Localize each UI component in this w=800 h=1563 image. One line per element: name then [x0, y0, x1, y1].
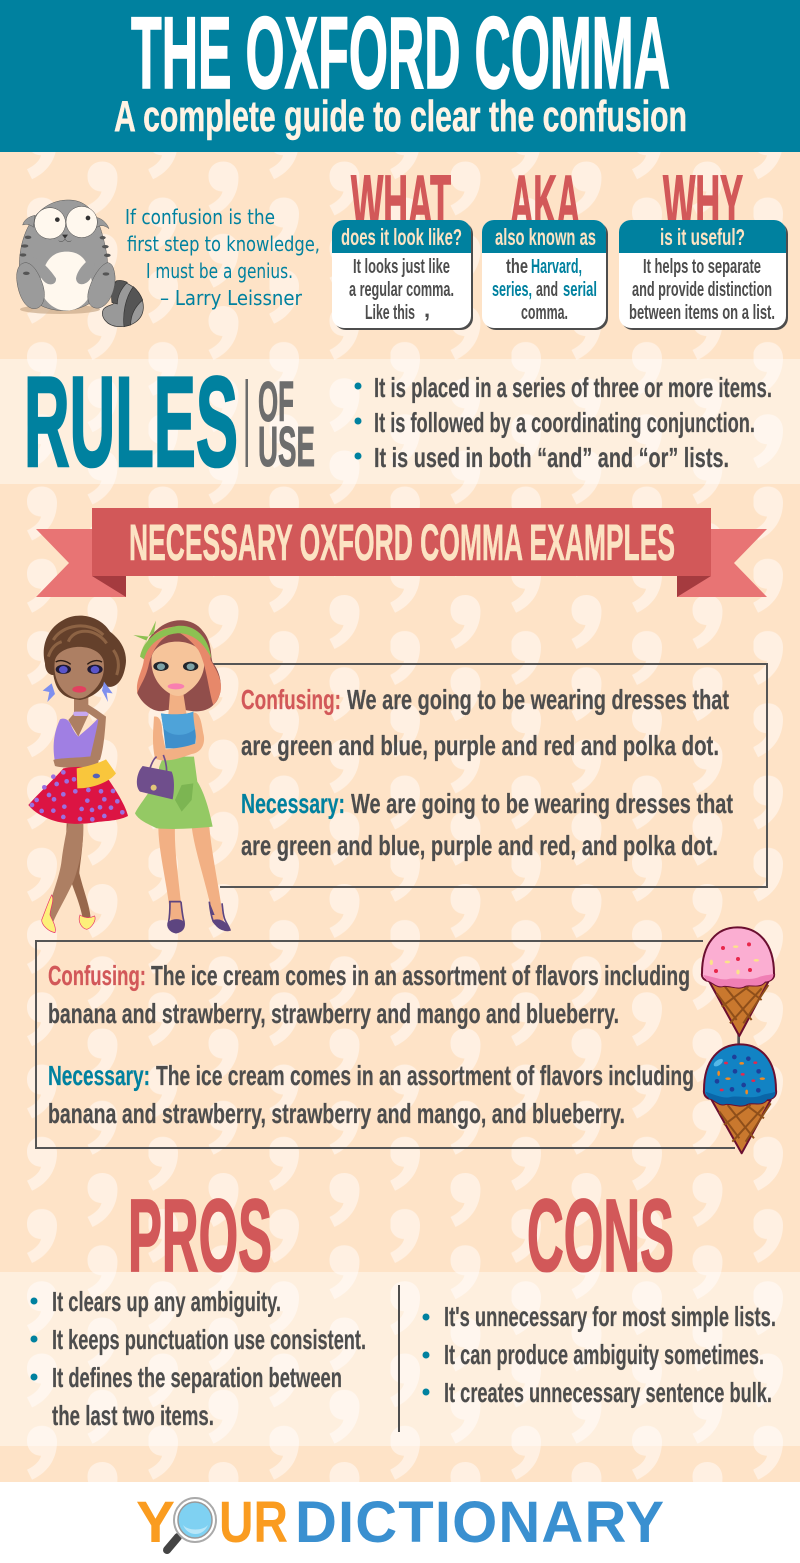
hair: [44, 616, 126, 700]
green skirt: [135, 757, 213, 829]
cat stripes: [20, 236, 111, 276]
rules list: [354, 372, 772, 473]
panel: aka: also known as: [495, 224, 596, 250]
panel: rules of use: RULES: [24, 351, 238, 494]
panel: aka: serial: [563, 279, 597, 301]
legs: [66, 823, 91, 918]
shoes: [42, 895, 55, 933]
panel: what: It looks just like: [353, 256, 450, 278]
pros list: the last two items.: [52, 1400, 214, 1431]
pros list: [30, 1286, 366, 1431]
necessary example: Necessary:: [48, 1060, 150, 1091]
panel: dresses example: [212, 664, 767, 887]
green headband: [140, 626, 211, 659]
pink cone: [702, 927, 774, 1036]
panel: pros and cons: [0, 1272, 800, 1446]
footer logo: DICTIONARY: [295, 1490, 664, 1555]
panel: what: WHAT: [351, 160, 451, 243]
neck: [68, 693, 88, 737]
footer logo: UR: [219, 1490, 288, 1555]
necessary example: [48, 1060, 694, 1129]
ribbon heading: [36, 508, 767, 597]
necessary example: [241, 788, 733, 861]
face: [151, 642, 204, 696]
panel: what: does it look like?: [341, 224, 462, 250]
icon: ice cream cones: [702, 927, 776, 1153]
quote: first step to knowledge,: [127, 232, 320, 256]
cat body: [19, 200, 108, 311]
illustration: girl in green skirt: [133, 620, 230, 933]
confusing example: [241, 684, 729, 761]
panel: rules of use: [0, 351, 800, 494]
confusing example: Confusing:: [241, 684, 341, 715]
panel: why: is it useful?: [660, 224, 745, 250]
cat eyes: [34, 208, 66, 239]
face: [54, 647, 104, 698]
cons list: [422, 1301, 776, 1408]
footer logo: Y: [136, 1490, 175, 1555]
lips: [168, 683, 184, 689]
pros list: It defines the separation between: [52, 1362, 342, 1393]
heading: of use: OF: [258, 370, 294, 434]
confusing example: [48, 960, 690, 1029]
panel: why: [619, 160, 788, 330]
heading: of use: [258, 370, 315, 479]
top: [54, 715, 101, 762]
legs: [158, 827, 183, 922]
quote: I must be a genius.: [146, 259, 293, 283]
arms: [153, 713, 204, 760]
panel: ice cream example: [36, 941, 735, 1148]
skirt: [28, 767, 128, 824]
lips: [72, 686, 86, 693]
panel: aka: AKA: [510, 160, 580, 243]
panel: what: a regular comma.: [349, 279, 454, 301]
panel: aka: the: [506, 256, 528, 278]
cat arms and legs: [17, 257, 115, 309]
yellow purse: [77, 759, 116, 788]
earrings: [43, 683, 55, 702]
panel: aka: series,: [492, 279, 532, 301]
footer logo: [0, 1482, 800, 1563]
panel: what: Like this: [365, 302, 415, 324]
blue cone: [704, 1044, 776, 1153]
quote: – Larry Leissner: [160, 286, 303, 310]
purple bag: [137, 755, 174, 799]
neck: [168, 693, 187, 715]
panel: what: [332, 160, 473, 330]
panel: aka: [482, 160, 608, 330]
header banner: [0, 0, 800, 152]
blue top: [161, 712, 197, 748]
eyes: [56, 661, 103, 674]
eyes: [153, 662, 198, 671]
text: PROS: [128, 1178, 272, 1293]
quote: If confusion is the: [125, 205, 275, 229]
quote: [125, 205, 320, 310]
hair back: [137, 620, 221, 711]
arm: [80, 702, 106, 760]
icon: confused cat: [17, 200, 143, 327]
confusing example: Confusing:: [48, 960, 146, 991]
icon: magnifying glass: [167, 1498, 216, 1550]
shoes: [168, 902, 184, 933]
pros list: It keeps punctuation use consistent.: [52, 1324, 366, 1355]
panel: aka: Harvard,: [531, 256, 582, 278]
panel: what: ,: [424, 297, 430, 322]
front hair: [137, 627, 221, 705]
necessary example: Necessary:: [241, 788, 345, 819]
pros list: It clears up any ambiguity.: [52, 1286, 281, 1317]
panel: aka: comma.: [521, 302, 568, 324]
panel: aka: and: [536, 279, 558, 301]
cat tail: [102, 280, 143, 327]
cat belly: [40, 252, 92, 311]
panel: rules of use: USE: [258, 415, 315, 479]
illustration: girl in red skirt: [28, 616, 128, 933]
